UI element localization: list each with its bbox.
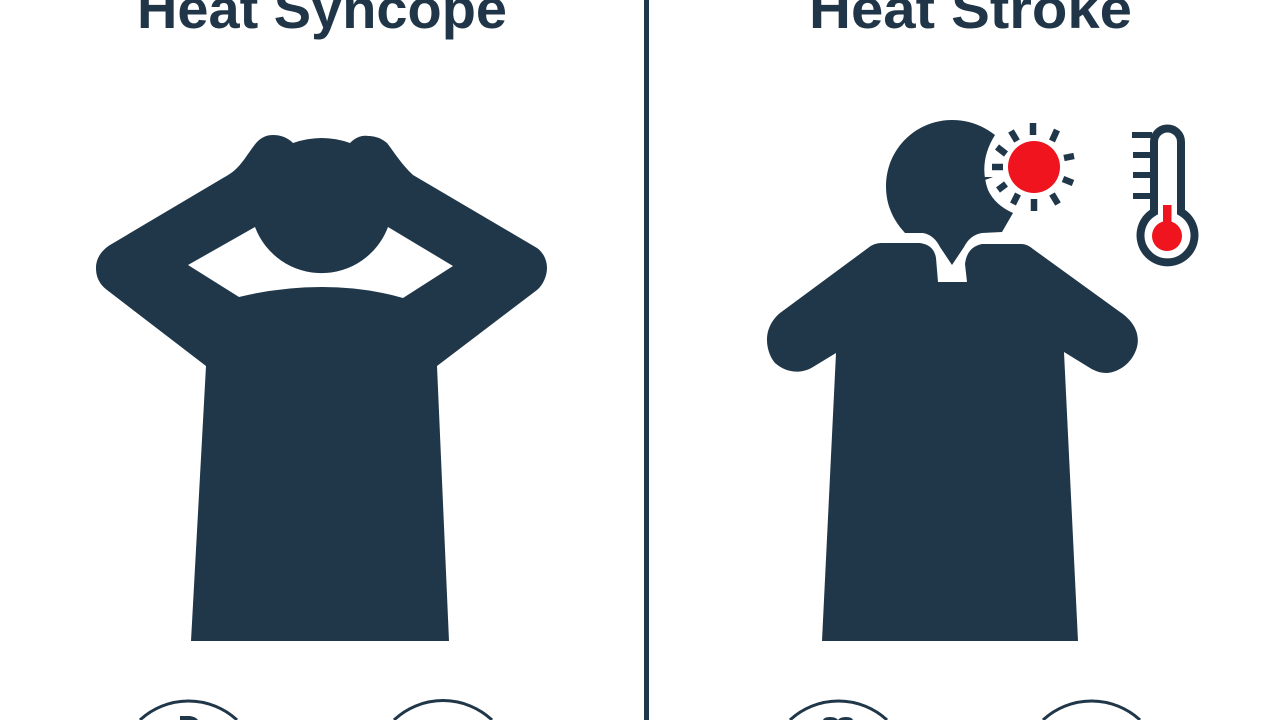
icon: thermometer [1132, 128, 1195, 262]
center divider [644, 0, 649, 720]
icon: bottom right circle badge [1043, 701, 1140, 720]
icon: red sun [985, 123, 1074, 211]
icon: bottom left circle badge [790, 701, 887, 720]
panel: heat stroke [767, 0, 1195, 720]
icon: person head [886, 120, 1013, 265]
panel: heat syncope [96, 0, 547, 720]
icon: bottom right circle badge [394, 701, 492, 720]
icon: bottom left circle badge [140, 701, 237, 720]
icon: person holding head with both hands [96, 135, 547, 641]
icon: person body [767, 243, 1138, 641]
